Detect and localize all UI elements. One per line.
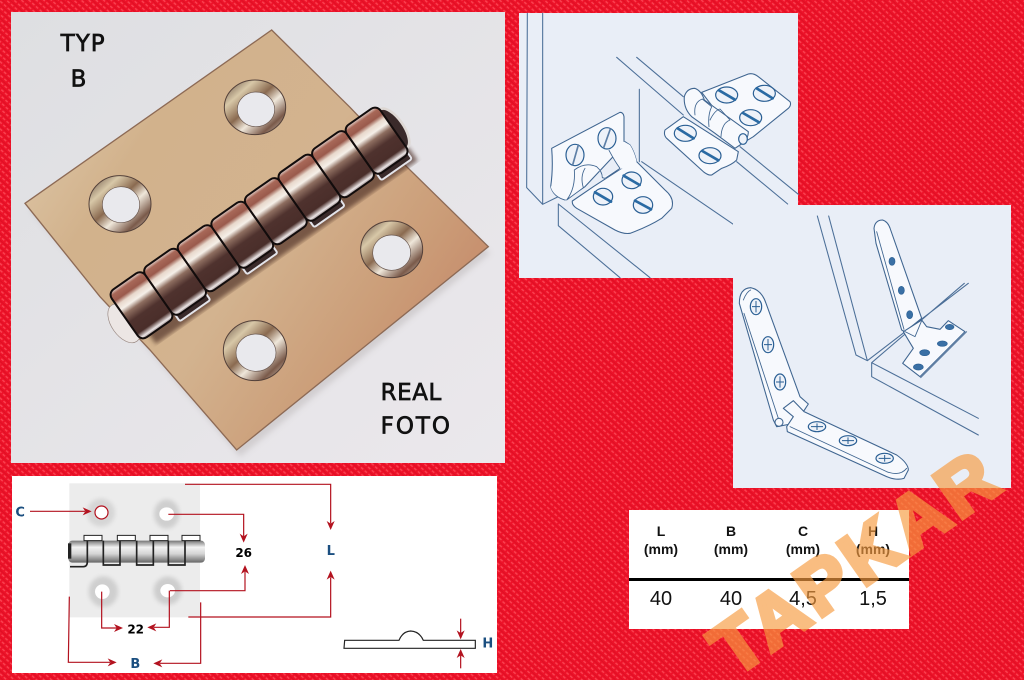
table values [650,588,887,610]
hole C marker [95,506,108,519]
table header: (mm) [644,541,678,557]
dimension labels: B [130,657,140,672]
label: REAL: REAL [381,380,442,406]
table header: (mm) [714,541,748,557]
small hinge [874,220,967,378]
table rule [629,578,909,581]
dimension labels: H [482,637,493,652]
hinge barrel with knuckles [94,99,422,355]
left hinge [551,112,672,234]
panel: installation drawing 1 [519,13,798,278]
panel: dimension drawing [12,476,497,673]
dimension labels: 26 [235,546,252,560]
table values: 4,5 [789,588,817,610]
table header: C [798,523,808,539]
label: TYP: TYP [60,31,105,57]
furniture lines and hinges [527,13,798,278]
label: B: B [71,67,86,93]
table values: 40 [650,588,672,610]
table header: B [726,523,736,539]
right hinge [664,74,791,175]
table header: H [868,523,878,539]
thickness profile [344,631,475,648]
panel: dimensions table [629,510,909,629]
large hinge [739,288,908,479]
table header: L [657,523,666,539]
barrel shadow [146,147,418,344]
dimension labels [15,505,493,672]
photo: steel hinge [25,30,490,457]
hinge plate [25,30,488,450]
panel: real photo of hinge [11,12,505,463]
dimension labels: 22 [127,623,144,637]
screw holes [89,80,423,381]
table values: 40 [720,588,742,610]
table header: (mm) [856,541,890,557]
panel: installation drawing 2 [733,205,1011,488]
dimension labels: C [15,505,25,520]
dimension labels: L [327,544,335,559]
dimension arrows [30,484,465,668]
technical hinge image [68,483,205,617]
table header: (mm) [786,541,820,557]
label: FOTO: FOTO [381,413,450,439]
furniture lines and hinges [739,216,978,479]
table header [644,523,890,557]
table values: 1,5 [859,588,887,610]
